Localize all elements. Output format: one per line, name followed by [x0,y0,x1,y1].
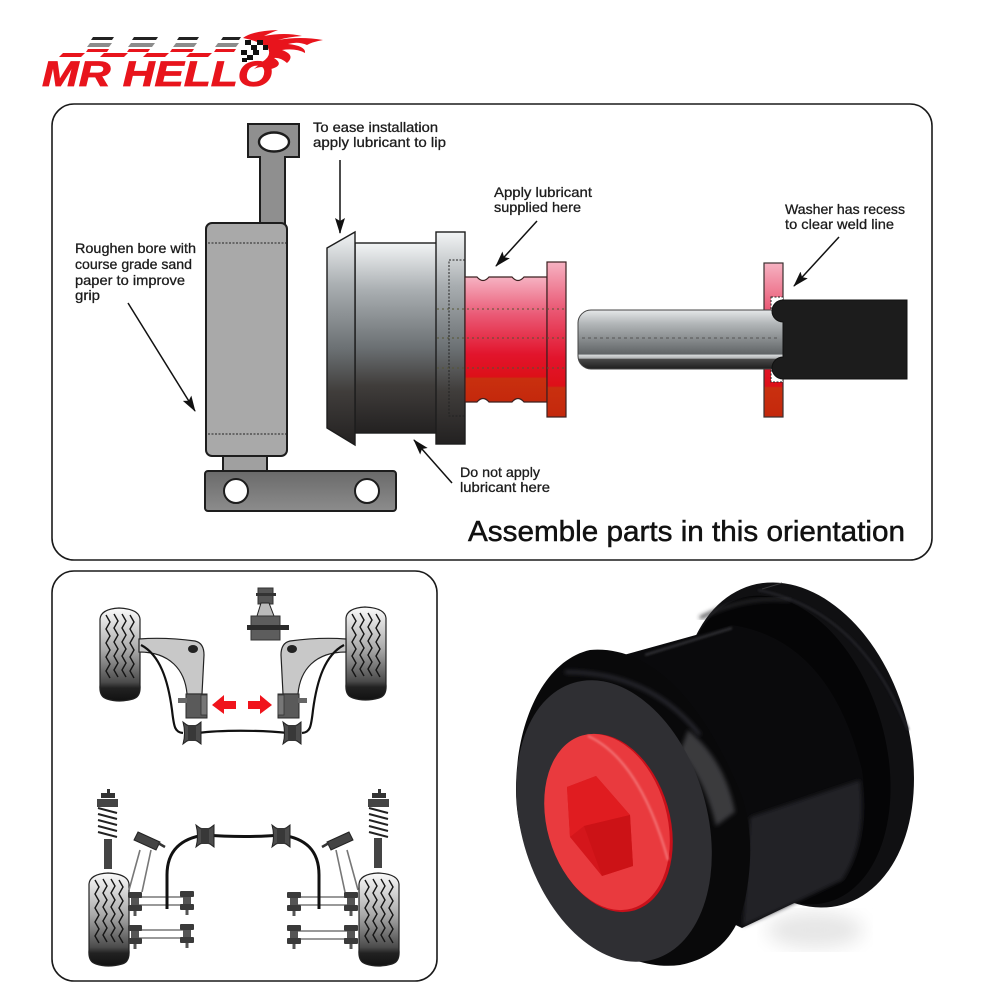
right shock and coil [368,789,389,868]
panel: suspension diagrams [52,571,437,981]
black arm with weld [772,300,907,379]
cylinder body [620,625,865,928]
rear suspension diagram [89,789,399,966]
heading: assemble parts: Assemble parts in this orientation [468,516,905,548]
callout: lubricant to lip: To ease installation [313,119,438,135]
front flange [516,650,750,966]
callout: apply lubricant here: supplied here [494,199,581,215]
front face [485,657,743,985]
logo: MR HELLO [42,30,323,94]
red arrow left [212,695,236,714]
logo flame [243,30,323,69]
washer [764,263,783,417]
callout: apply lubricant here: Apply lubricant [494,184,592,200]
front suspension diagram [100,588,386,744]
callout: apply lubricant here [494,184,592,215]
callout: lubricant to lip: apply lubricant to lip [313,134,446,150]
callout: do not apply: lubricant here [460,479,550,495]
metal rod [578,310,785,369]
rear flange [644,555,950,935]
logo wordmark: MR HELLO [42,55,272,94]
arrows [128,160,839,483]
logo checkered flag [241,40,268,62]
left upper links [129,832,165,892]
floor shadow [767,912,863,948]
red insert [525,719,693,927]
shock absorber sleeve [205,124,396,511]
product photo: black bushing with red insert [485,555,950,985]
anti-roll bar [198,731,288,733]
callout: do not apply: Do not apply [460,464,540,480]
lower links [133,897,350,939]
right upper links [322,832,358,892]
callout: roughen bore: course grade sand [75,256,192,272]
callout: washer recess [785,201,905,232]
callout: roughen bore: paper to improve [75,272,185,288]
callout: roughen bore [75,240,196,303]
callout: washer recess: to clear weld line [785,216,894,232]
left control arm [139,638,207,733]
link bushes [128,891,358,949]
callout: washer recess: Washer has recess [785,201,905,217]
bushing inner (red) [437,262,566,417]
callout: roughen bore: grip [75,287,100,303]
rear anti-roll bar [167,835,319,909]
red arrow right [248,695,272,714]
bushing outer (grey) [327,232,465,445]
callout: do not apply [460,464,550,495]
callout: lubricant to lip [313,119,446,150]
left shock and coil [97,789,118,869]
exploded bushing detail [247,588,289,640]
panel: assembly diagram [52,104,932,560]
callout: roughen bore: Roughen bore with [75,240,196,256]
right control arm [278,638,346,733]
hex socket [567,776,633,876]
